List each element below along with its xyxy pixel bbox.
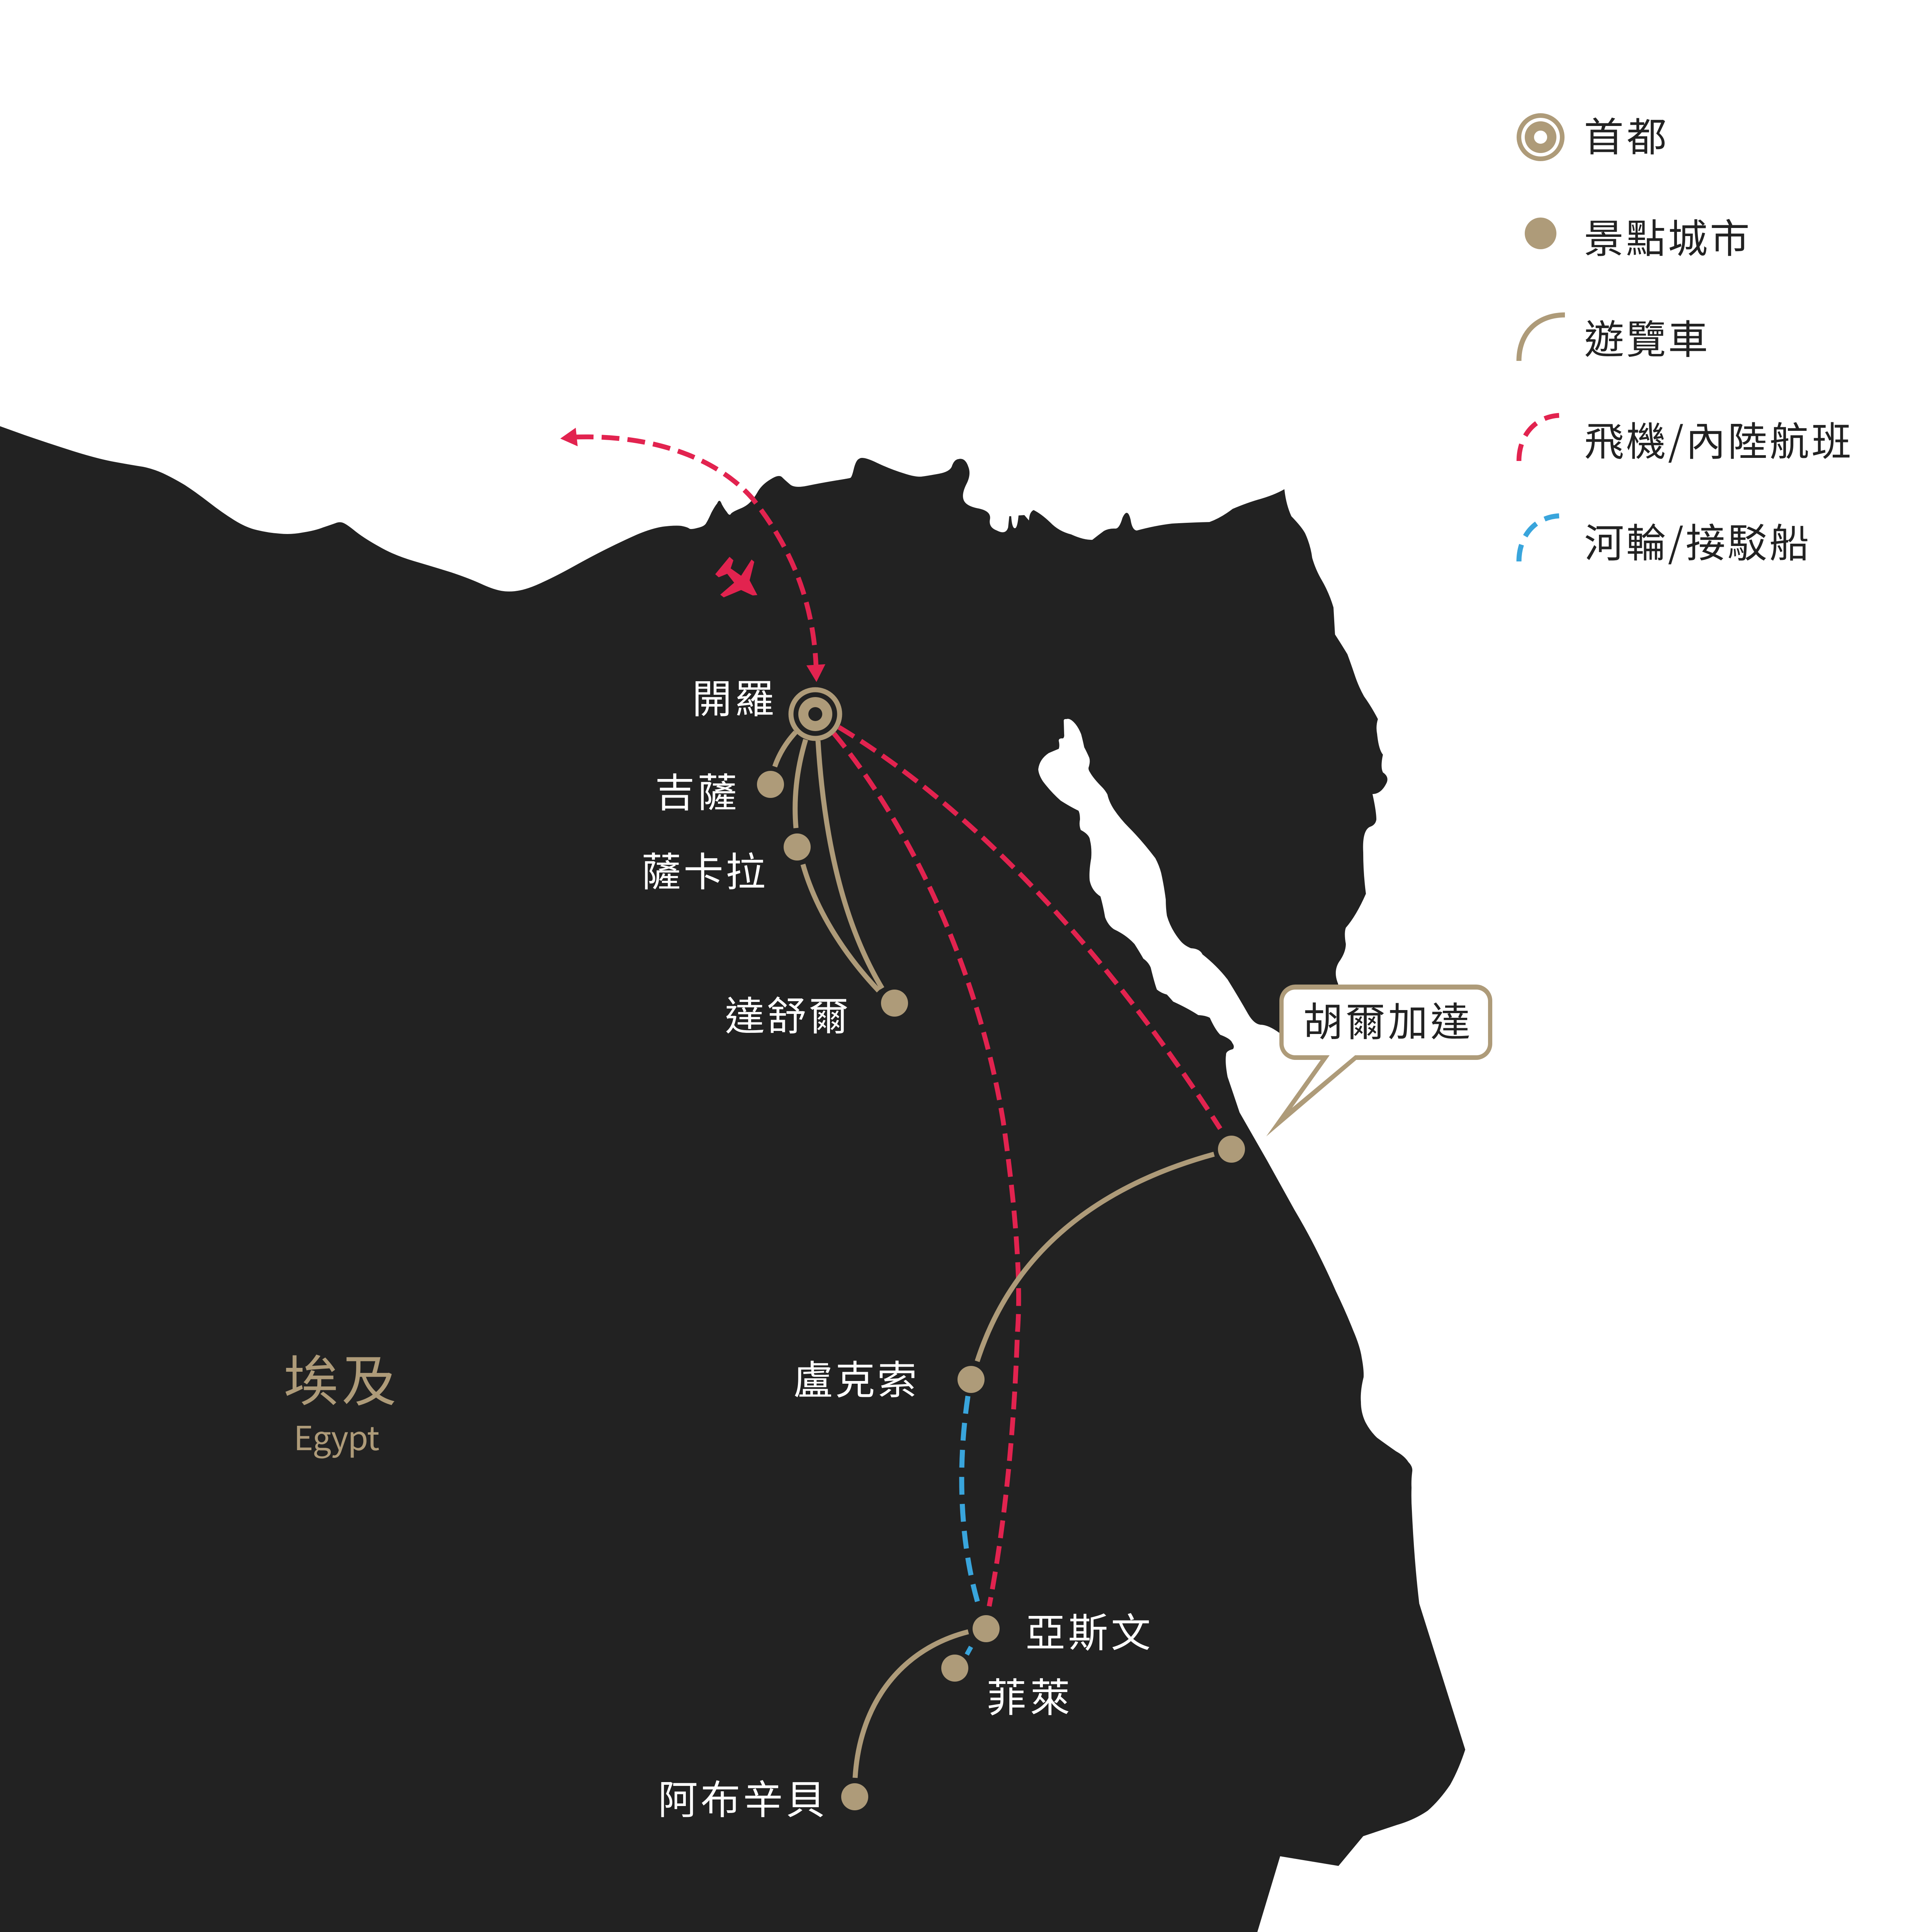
icon: airplane: [715, 557, 757, 597]
legend item: flight: 飛機/內陸航班: [1584, 410, 1851, 467]
route: domestic flight Cairo to Aswan: [834, 733, 1019, 1606]
route: coach Saqqara to Dahshur: [803, 864, 879, 991]
route: international flight arc into Cairo: [560, 428, 825, 682]
route: coach Cairo to Dahshur: [818, 741, 882, 988]
label: Luxor: 盧克索: [793, 1358, 917, 1403]
legend item: attraction city: 景點城市: [1584, 217, 1750, 261]
route: coach Cairo to Giza: [775, 732, 796, 767]
label: Giza: 吉薩: [655, 771, 737, 815]
label: Philae: 菲萊: [986, 1676, 1070, 1720]
city marker: Philae: [941, 1655, 968, 1682]
city marker: Luxor: [957, 1366, 985, 1393]
map of Egypt silhouette: [0, 426, 1465, 1932]
label: Cairo: 開羅: [692, 677, 774, 721]
label: Saqqara: 薩卡拉: [641, 850, 765, 895]
legend item: capital: [1519, 115, 1667, 160]
city marker: Dahshur: [881, 990, 908, 1017]
legend item: capital: 首都: [1584, 115, 1667, 160]
legend: [1519, 115, 1851, 569]
callout: Hurghada: [1266, 985, 1492, 1136]
label: Aswan: 亞斯文: [1026, 1611, 1151, 1655]
country label: Egypt: 埃及: [284, 1351, 396, 1413]
route: coach Aswan to Abu Simbel: [855, 1632, 968, 1778]
legend item: coach: [1519, 315, 1708, 362]
city marker: Giza: [757, 771, 784, 798]
country label: Egypt: [284, 1351, 396, 1460]
route: river cruise Luxor to Aswan: [962, 1396, 979, 1607]
city marker: Hurghada: [1218, 1136, 1245, 1163]
legend item: coach: 遊覽車: [1584, 318, 1708, 362]
route: coach Hurghada to Luxor: [977, 1154, 1214, 1361]
city marker: Abu Simbel: [841, 1783, 868, 1810]
route: ferry Aswan to Philae: [967, 1647, 971, 1655]
route: coach Cairo to Saqqara: [795, 740, 806, 828]
label: Dahshur: 達舒爾: [725, 994, 849, 1039]
callout: Hurghada: 胡爾加達: [1303, 1000, 1470, 1044]
route: domestic flight Cairo to Hurghada: [839, 727, 1220, 1129]
legend item: river cruise: 河輪/接駁船: [1584, 511, 1809, 569]
city marker: Saqqara: [784, 833, 811, 861]
label: Abu Simbel: 阿布辛貝: [658, 1778, 825, 1822]
capital marker: Cairo: [791, 690, 840, 738]
country label: Egypt: Egypt: [294, 1412, 379, 1460]
city marker: Aswan: [973, 1615, 1000, 1642]
